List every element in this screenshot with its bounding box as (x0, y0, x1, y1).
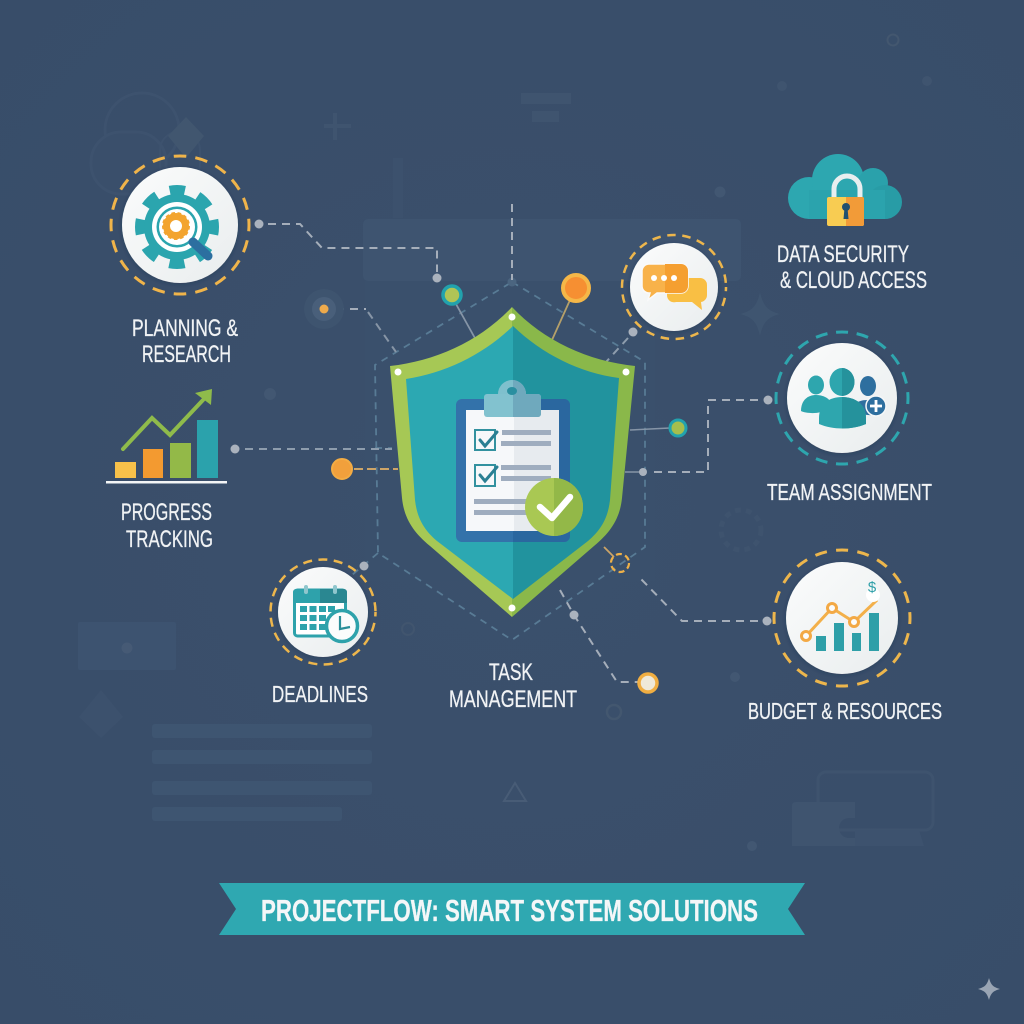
icon: gear with magnifier (140, 190, 214, 264)
node: communication bubbles (622, 235, 726, 339)
icon: bar chart with arrow (106, 389, 227, 484)
label: DEADLINES (272, 681, 368, 707)
label: & CLOUD ACCESS (780, 267, 927, 294)
label: task management: MANAGEMENT (449, 686, 577, 713)
background ghost shapes (78, 34, 933, 851)
icon: chart with dollar (802, 579, 880, 651)
connector nodes (230, 220, 772, 692)
node: data security & cloud access (777, 154, 927, 294)
label: RESEARCH (142, 341, 231, 368)
node: progress tracking (106, 389, 227, 553)
icon: chart with dollar: $ (868, 579, 877, 596)
label: TEAM ASSIGNMENT (767, 479, 932, 505)
icon: cloud with padlock (788, 154, 902, 226)
node: deadlines (270, 560, 376, 707)
label (777, 241, 927, 294)
label: task management (449, 659, 577, 713)
title banner: PROJECTFLOW: SMART SYSTEM SOLUTIONS (261, 893, 758, 928)
node: planning & research (111, 156, 249, 368)
label: BUDGET & RESOURCES (748, 698, 942, 724)
label: task management: TASK (489, 659, 533, 686)
node: budget & resources (748, 550, 942, 724)
label (121, 499, 213, 553)
green check badge (525, 478, 583, 536)
label: TRACKING (126, 526, 213, 553)
icon: calendar and clock (293, 585, 358, 642)
icon: speech bubbles (642, 264, 707, 310)
title banner (219, 883, 805, 935)
label: PLANNING & (132, 315, 238, 342)
label: DATA SECURITY (777, 241, 909, 268)
label (132, 315, 238, 368)
dashed hexagon frame (352, 278, 645, 640)
icon: people with plus (801, 368, 886, 428)
connector lines (245, 204, 758, 682)
central shield (390, 307, 635, 617)
icon: corner sparkle (978, 978, 1000, 1000)
node: team assignment (767, 332, 932, 505)
label: PROGRESS (121, 499, 212, 526)
clipboard (456, 380, 570, 542)
